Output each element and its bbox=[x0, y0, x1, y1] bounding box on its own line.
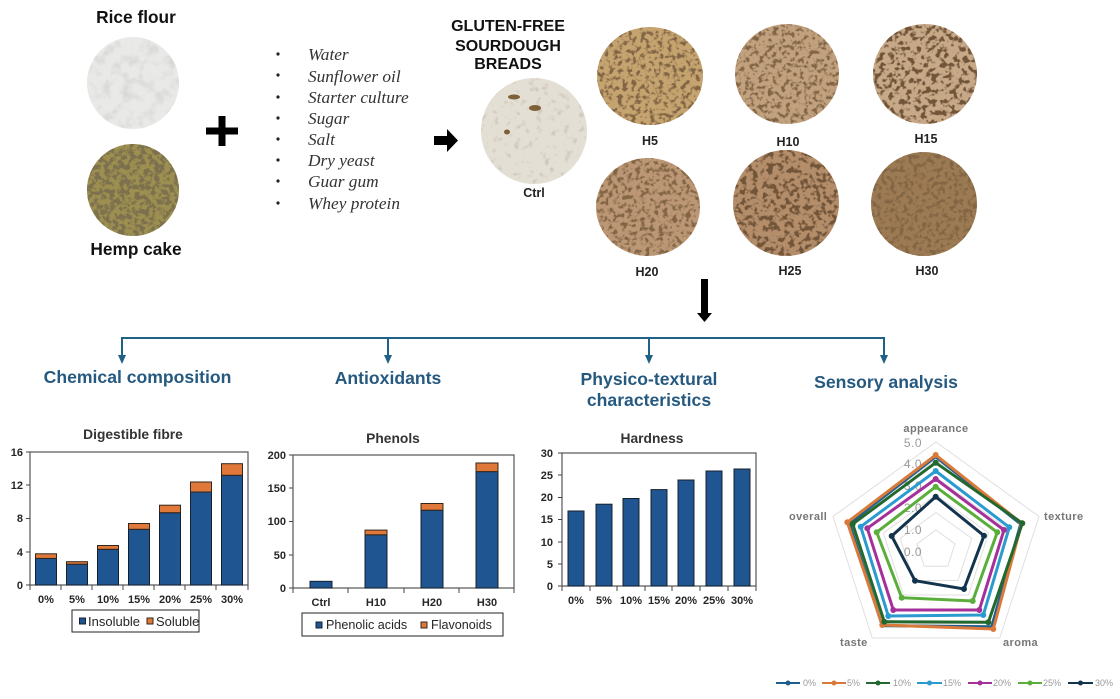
chart: digestible fibre: 30% bbox=[221, 594, 243, 606]
chart: phenols: 0 bbox=[280, 583, 286, 595]
list: other ingredients: Salt bbox=[308, 130, 336, 149]
legend: radar series: 0% bbox=[803, 678, 816, 688]
heading: rice flour: Rice flour bbox=[96, 7, 176, 27]
chart: digestible fibre: 20% bbox=[159, 594, 181, 606]
list: other ingredients: Sunflower oil bbox=[308, 67, 401, 86]
legend: radar series bbox=[776, 678, 1113, 688]
list: other ingredients bbox=[276, 45, 409, 213]
legend: radar series: 20% bbox=[993, 678, 1011, 688]
series: 25% bbox=[874, 484, 1000, 604]
bread: H10 bbox=[735, 24, 839, 149]
connector: analysis branches bbox=[118, 337, 888, 364]
bread: H20: H20 bbox=[636, 265, 659, 279]
legend: fibre: Soluble bbox=[156, 614, 199, 629]
chart: hardness: 5 bbox=[547, 559, 553, 571]
bread: H5 bbox=[597, 27, 703, 148]
heading: hemp cake: Hemp cake bbox=[90, 239, 182, 259]
chart: digestible fibre: 8 bbox=[17, 513, 23, 525]
legend: phenols bbox=[302, 613, 503, 636]
chart: phenols: Phenols bbox=[366, 431, 420, 446]
list: other ingredients: Sugar bbox=[308, 109, 350, 128]
bread: control: Ctrl bbox=[523, 186, 545, 200]
chart: digestible fibre: 0 bbox=[17, 580, 23, 592]
list: other ingredients: Guar gum bbox=[308, 172, 379, 191]
legend: fibre: Insoluble bbox=[88, 614, 140, 629]
chart: hardness: 20 bbox=[541, 492, 553, 504]
bread: control bbox=[481, 78, 587, 200]
chart: hardness: 0% bbox=[568, 595, 584, 607]
icon: plus sign bbox=[206, 116, 238, 146]
legend: fibre bbox=[72, 610, 199, 632]
chart: sensory radar: texture bbox=[1044, 511, 1083, 523]
legend: radar series: 30% bbox=[1095, 678, 1113, 688]
chart: hardness: Hardness bbox=[621, 431, 684, 446]
chart: digestible fibre bbox=[11, 427, 248, 632]
list: other ingredients: Starter culture bbox=[308, 88, 409, 107]
heading: chemical composition: Chemical composition bbox=[44, 367, 231, 387]
bread: H30: H30 bbox=[916, 264, 939, 278]
bread: H5: H5 bbox=[642, 134, 658, 148]
photo: rice flour bbox=[87, 37, 179, 129]
chart: hardness bbox=[541, 431, 756, 607]
chart: sensory radar: 2.0 bbox=[904, 501, 922, 515]
chart: phenols: H30 bbox=[477, 597, 497, 609]
bread: H30 bbox=[871, 152, 977, 278]
chart: phenols: 50 bbox=[274, 550, 286, 562]
chart: digestible fibre: 16 bbox=[11, 447, 23, 459]
chart: hardness: 10 bbox=[541, 537, 553, 549]
series: 0% bbox=[849, 457, 1021, 627]
bread: H15: H15 bbox=[915, 132, 938, 146]
series: 15% bbox=[858, 468, 1012, 618]
chart: sensory radar: appearance bbox=[903, 423, 969, 435]
legend: phenols: Phenolic acids bbox=[326, 618, 407, 632]
bread: H25 bbox=[733, 150, 839, 278]
heading: gluten-free sourdough breads bbox=[451, 18, 565, 73]
chart: hardness: 15% bbox=[648, 595, 670, 607]
chart: digestible fibre: 25% bbox=[190, 594, 212, 606]
arrow: breads to analyses bbox=[697, 279, 712, 322]
chart: sensory radar: taste bbox=[840, 637, 868, 649]
heading: gluten-free sourdough breads: BREADS bbox=[474, 56, 542, 73]
chart: phenols: 150 bbox=[268, 483, 286, 495]
chart: hardness: 20% bbox=[675, 595, 697, 607]
arrow: ingredients to breads bbox=[434, 129, 458, 152]
list: other ingredients: Whey protein bbox=[308, 194, 400, 213]
chart: digestible fibre: Digestible fibre bbox=[83, 427, 183, 442]
heading: antioxidants: Antioxidants bbox=[335, 368, 441, 388]
ingredient: hemp cake bbox=[87, 144, 182, 259]
bread: H15 bbox=[873, 24, 977, 146]
chart: hardness: 30% bbox=[731, 595, 753, 607]
bread: H20 bbox=[596, 158, 700, 279]
heading: physico-textural characteristics: characteristics bbox=[587, 390, 711, 410]
legend: radar series: 10% bbox=[893, 678, 911, 688]
chart: phenols: 200 bbox=[268, 450, 286, 462]
heading: physico-textural characteristics: Physico-textural bbox=[581, 369, 717, 389]
bread: H25: H25 bbox=[779, 264, 802, 278]
series: 20% bbox=[865, 476, 1006, 612]
ingredient: rice flour bbox=[87, 7, 179, 129]
chart: hardness: 25% bbox=[703, 595, 725, 607]
legend: phenols: Flavonoids bbox=[431, 618, 492, 632]
chart: digestible fibre: 15% bbox=[128, 594, 150, 606]
chart: sensory radar: 5.0 bbox=[904, 436, 922, 450]
chart: hardness: 30 bbox=[541, 448, 553, 460]
chart: sensory radar: overall bbox=[789, 511, 827, 523]
legend: radar series: 25% bbox=[1043, 678, 1061, 688]
chart: hardness: 10% bbox=[620, 595, 642, 607]
chart: hardness: 15 bbox=[541, 514, 553, 526]
chart: phenols: 100 bbox=[268, 516, 286, 528]
heading: gluten-free sourdough breads: SOURDOUGH bbox=[455, 38, 561, 55]
chart: digestible fibre: 0% bbox=[38, 594, 54, 606]
chart: digestible fibre: 5% bbox=[69, 594, 85, 606]
legend: radar series: 15% bbox=[943, 678, 961, 688]
chart: digestible fibre: 4 bbox=[17, 547, 24, 559]
chart: digestible fibre: 10% bbox=[97, 594, 119, 606]
legend: radar series: 5% bbox=[847, 678, 860, 688]
chart: hardness: 0 bbox=[547, 581, 553, 593]
chart: sensory radar: 3.0 bbox=[904, 479, 922, 493]
series: 30% bbox=[889, 494, 986, 592]
chart: hardness: 25 bbox=[541, 470, 553, 482]
chart: phenols bbox=[268, 431, 514, 636]
chart: sensory radar: 1.0 bbox=[904, 523, 922, 537]
chart: phenols: H10 bbox=[366, 597, 386, 609]
chart: digestible fibre: 12 bbox=[11, 480, 23, 492]
series: 10% bbox=[850, 460, 1025, 625]
heading: gluten-free sourdough breads: GLUTEN-FREE bbox=[451, 18, 565, 35]
list: other ingredients: Dry yeast bbox=[307, 151, 376, 170]
chart: sensory radar: aroma bbox=[1003, 637, 1038, 649]
photo: hemp cake bbox=[87, 144, 179, 236]
chart: phenols: H20 bbox=[422, 597, 442, 609]
chart: sensory radar: 0.0 bbox=[904, 545, 922, 559]
chart: phenols: Ctrl bbox=[312, 597, 330, 609]
bread: H10: H10 bbox=[777, 135, 800, 149]
chart: hardness: 5% bbox=[596, 595, 612, 607]
heading: sensory analysis: Sensory analysis bbox=[814, 372, 958, 392]
series: 5% bbox=[845, 452, 1024, 632]
list: other ingredients: Water bbox=[308, 45, 349, 64]
chart: sensory radar bbox=[776, 423, 1113, 688]
chart: sensory radar: 4.0 bbox=[904, 457, 922, 471]
